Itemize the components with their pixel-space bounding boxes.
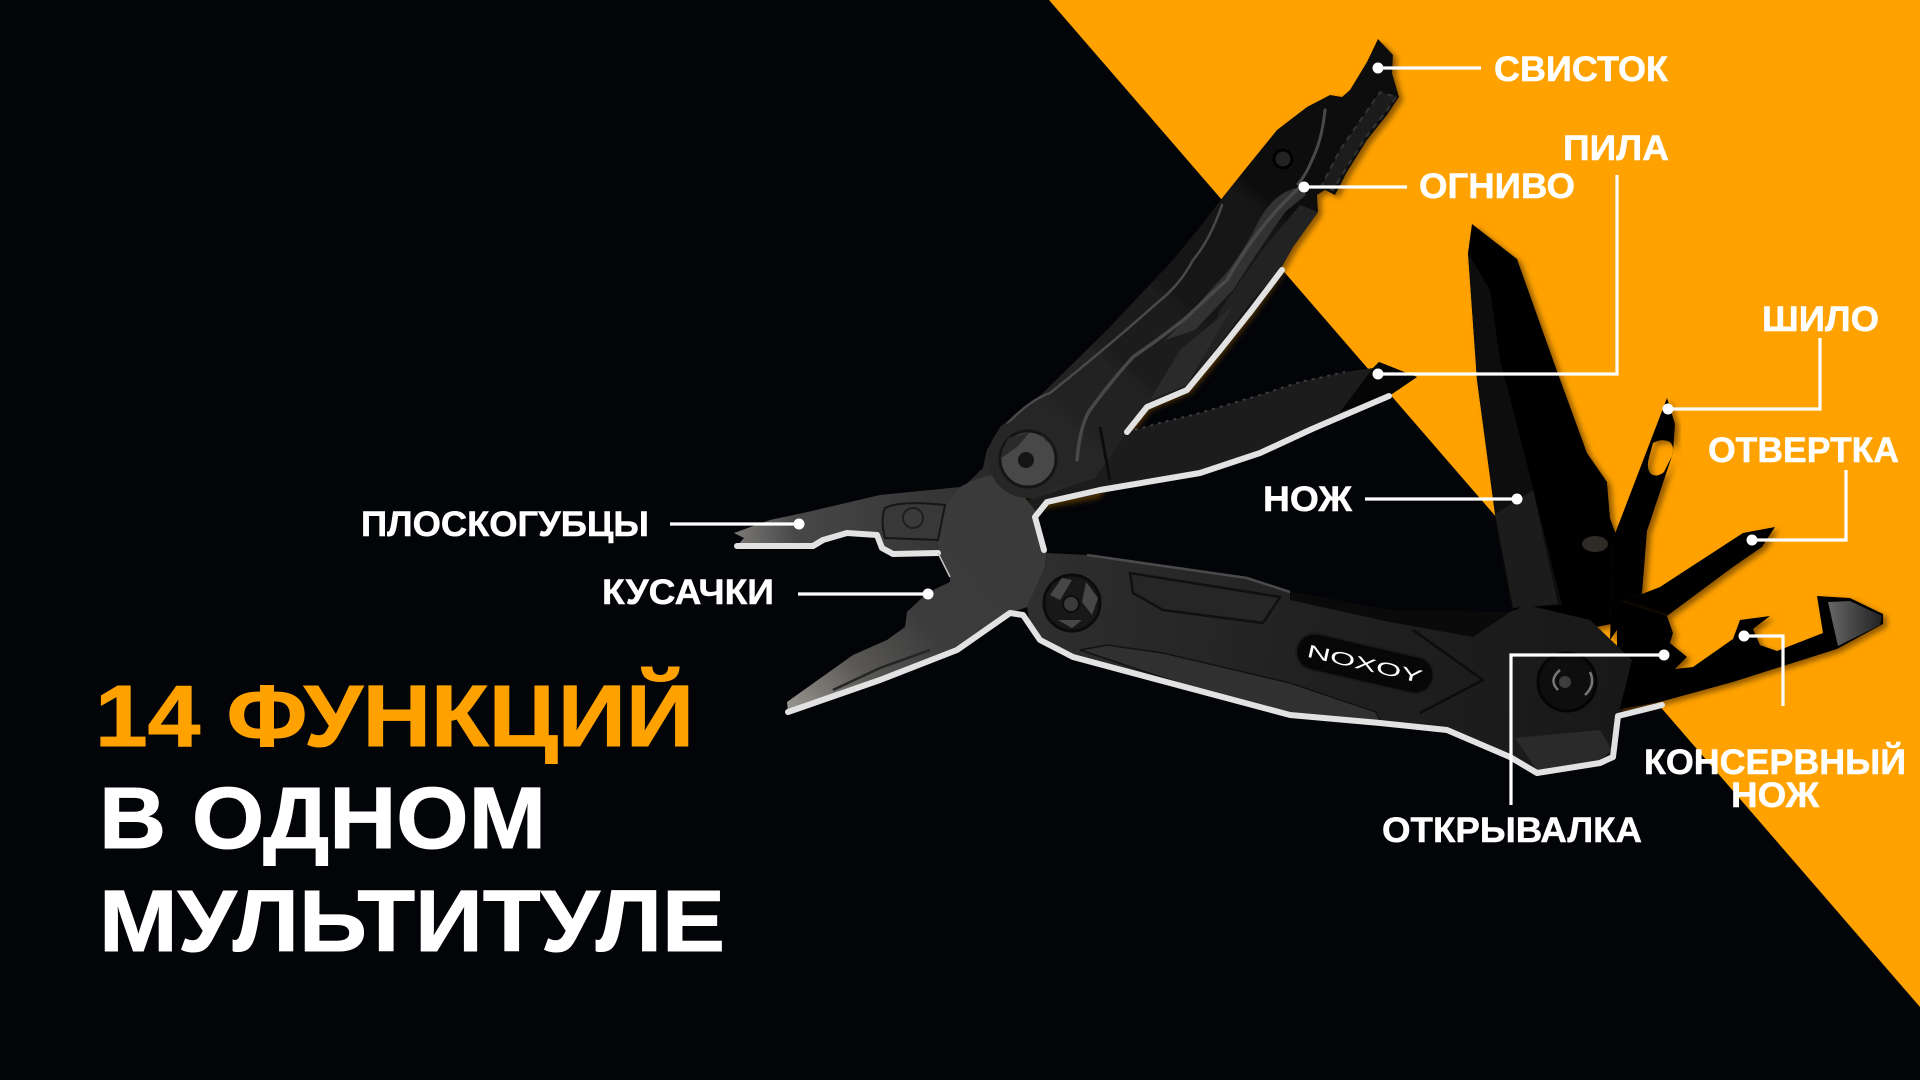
lower pivot: [1044, 575, 1100, 631]
callout: открывалка: ОТКРЫВАЛКА: [1382, 811, 1642, 850]
brand badge: [1293, 630, 1437, 697]
headline line 3: МУЛЬТИТУЛЕ: [99, 873, 725, 970]
rear pivot: [1538, 653, 1596, 711]
upper pivot: [988, 418, 1068, 498]
screwdriver: [1620, 527, 1775, 640]
callout: свисток: [1372, 50, 1669, 89]
callout: нож: [1263, 480, 1522, 519]
headline: [95, 667, 725, 970]
knife blade: [1468, 224, 1632, 640]
callout: отвертка: ОТВЕРТКА: [1708, 431, 1899, 470]
callout: огниво: [1298, 167, 1575, 206]
can opener and bottle opener: [1617, 596, 1883, 710]
pliers lower jaw and central plate: [787, 475, 1047, 712]
callout: свисток: СВИСТОК: [1494, 50, 1669, 89]
jaw inner plate and screw: [882, 503, 945, 540]
background: orange triangle: [1049, 0, 1920, 1007]
brand badge: NOXOY: [1305, 641, 1425, 687]
callout: плоскогубцы: ПЛОСКОГУБЦЫ: [361, 505, 649, 544]
pliers upper jaw: [734, 487, 960, 554]
callout: шило: ШИЛО: [1762, 300, 1879, 339]
callout: кусачки: КУСАЧКИ: [602, 573, 774, 612]
callout: кусачки: [602, 573, 934, 612]
callout: консервный нож: НОЖ: [1731, 776, 1819, 815]
callout: нож: НОЖ: [1263, 480, 1352, 519]
multitool illustration: [734, 39, 1883, 773]
lower handle: [1027, 553, 1632, 773]
jaw groove: [833, 650, 930, 690]
callout: пила: ПИЛА: [1563, 129, 1669, 168]
callout: пила: [1372, 129, 1669, 380]
callout: отвертка: [1708, 431, 1899, 546]
callout: шило: [1662, 300, 1879, 414]
saw blade: [1000, 362, 1417, 517]
callout: плоскогубцы: [361, 505, 804, 544]
white edge highlights: [737, 270, 1662, 773]
headline line 2: В ОДНОМ: [99, 770, 546, 867]
callout: огниво: ОГНИВО: [1419, 167, 1575, 206]
callout: открывалка: [1382, 650, 1670, 850]
awl: [1610, 398, 1675, 640]
headline line 1: 14 ФУНКЦИЙ: [95, 667, 694, 765]
upper handle with whistle and fire starter: [963, 39, 1399, 505]
callout: консервный нож: КОНСЕРВНЫЙ: [1644, 742, 1906, 782]
callout: консервный нож: [1644, 630, 1906, 815]
